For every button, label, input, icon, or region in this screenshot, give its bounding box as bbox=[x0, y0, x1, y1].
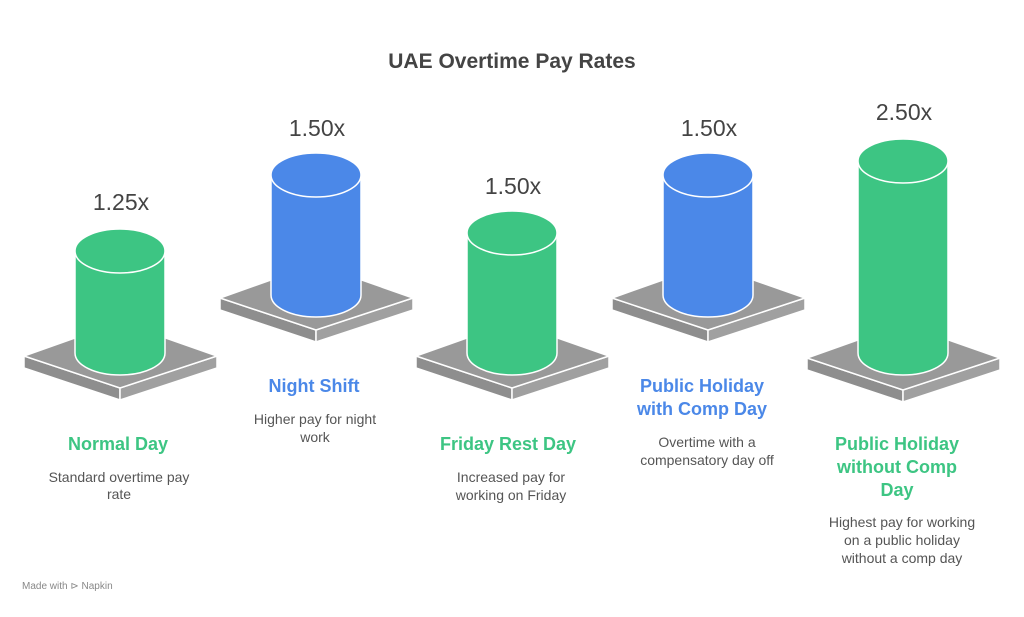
value: 1.25x: 1.25x bbox=[93, 189, 150, 215]
column: normal day bbox=[24, 189, 217, 502]
description: without comp: Highest pay for working bbox=[829, 514, 975, 530]
heading: without comp day: Public Holiday bbox=[835, 434, 959, 454]
heading: night shift: Night Shift bbox=[269, 376, 359, 396]
footer: made with napkin: Made with ⊳ Napkin bbox=[22, 581, 113, 592]
value: 1.50x: 1.50x bbox=[485, 173, 542, 199]
description: friday: Increased pay for bbox=[457, 469, 565, 485]
title: UAE Overtime Pay Rates bbox=[388, 50, 636, 73]
plate: normal day bbox=[24, 322, 217, 400]
cylinder: with comp bbox=[663, 153, 753, 317]
cylinder: night shift bbox=[271, 153, 361, 317]
description: without comp: on a public holiday bbox=[844, 532, 960, 548]
description: night shift: Higher pay for night bbox=[254, 411, 376, 427]
heading: without comp day: without Comp bbox=[836, 457, 957, 477]
value: 1.50x: 1.50x bbox=[289, 115, 346, 141]
column: public holiday with comp day bbox=[612, 115, 805, 468]
column: friday rest day bbox=[416, 173, 609, 503]
description: with comp: compensatory day off bbox=[640, 452, 774, 468]
cylinder: without comp bbox=[858, 139, 948, 375]
description: without comp: without a comp day bbox=[841, 550, 962, 566]
plate: with comp bbox=[612, 264, 805, 342]
value: 2.50x: 2.50x bbox=[876, 99, 933, 125]
heading: without comp day: Day bbox=[880, 480, 914, 500]
heading: normal day: Normal Day bbox=[68, 434, 168, 454]
column: night shift bbox=[220, 115, 413, 445]
heading: friday rest day: Friday Rest Day bbox=[440, 434, 576, 454]
cylinder: normal day bbox=[75, 229, 165, 375]
column: public holiday without comp day bbox=[807, 99, 1000, 566]
heading: with comp day: Public Holiday bbox=[640, 376, 764, 396]
cylinder: friday bbox=[467, 211, 557, 375]
plate: friday bbox=[416, 322, 609, 400]
description: friday: working on Friday bbox=[455, 487, 566, 503]
description: with comp: Overtime with a bbox=[658, 434, 756, 450]
plate: without comp bbox=[807, 324, 1000, 402]
heading: with comp day: with Comp Day bbox=[636, 399, 767, 419]
description: night shift: work bbox=[299, 429, 331, 445]
value: 1.50x: 1.50x bbox=[681, 115, 738, 141]
description: normal day: rate bbox=[107, 486, 131, 502]
plate: night shift bbox=[220, 264, 413, 342]
description: normal day: Standard overtime pay bbox=[49, 469, 189, 485]
